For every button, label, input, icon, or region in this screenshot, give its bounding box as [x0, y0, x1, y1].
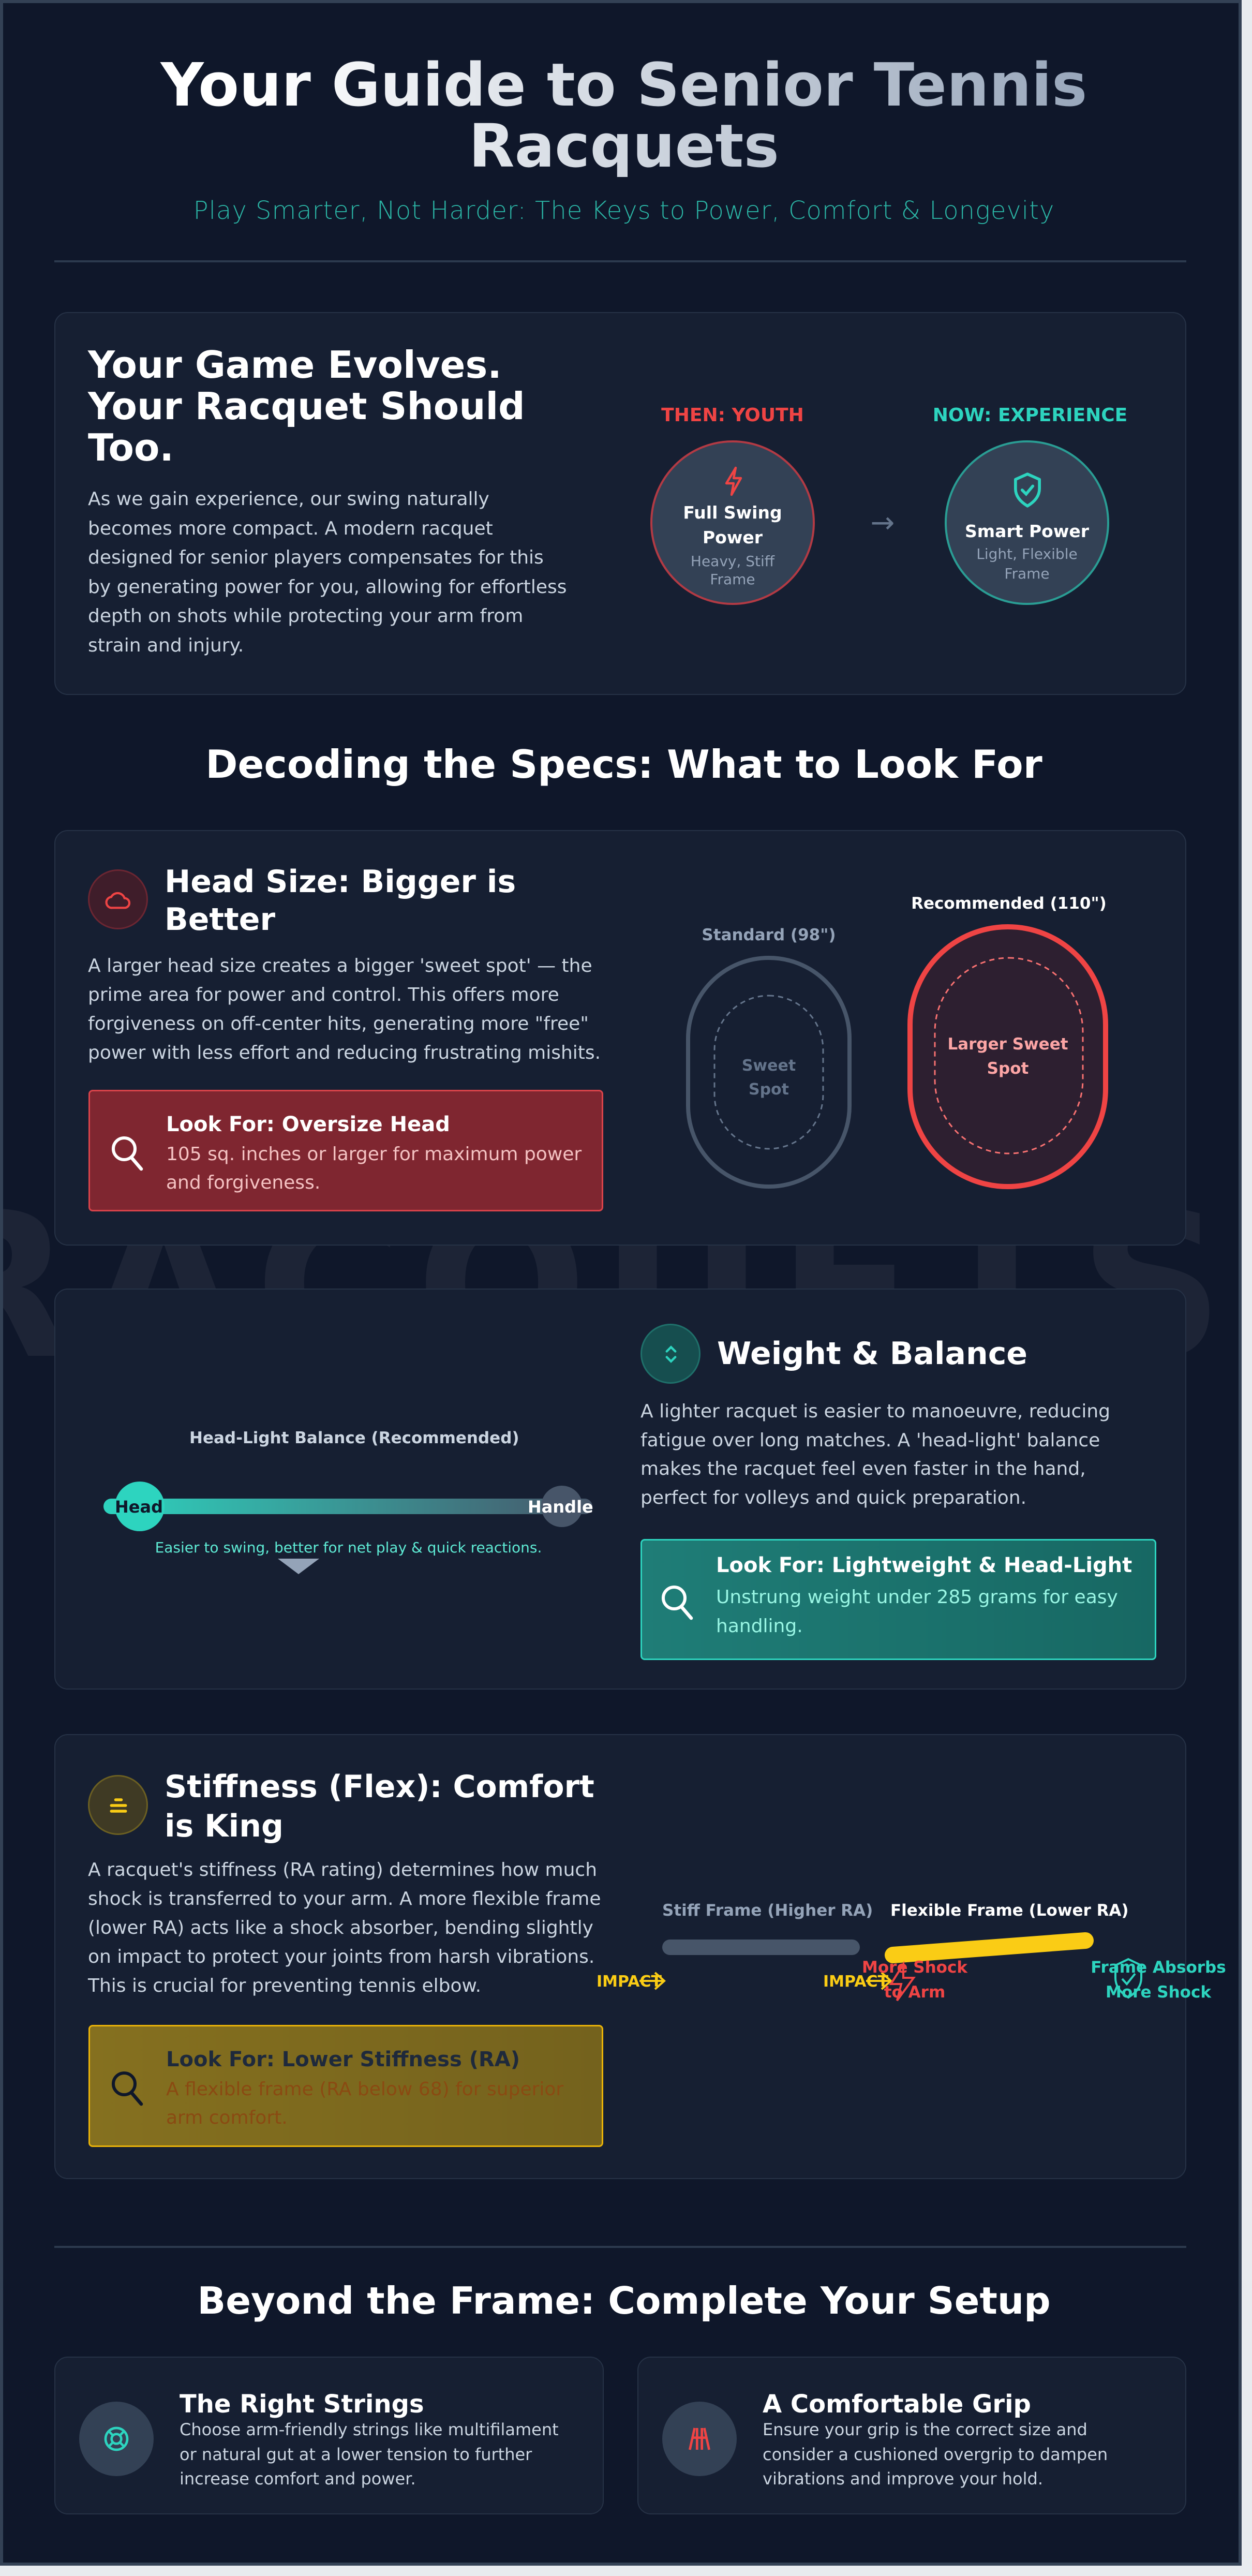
text: stiffness body	[88, 1859, 601, 1996]
circle: full swing power: Heavy, Stiff	[691, 553, 774, 570]
panel: weight and balance	[54, 1289, 1186, 1690]
card: grip: Ensure your grip is the correct size and	[763, 2420, 1087, 2439]
title	[3, 55, 1245, 177]
title: Racquets	[469, 112, 779, 181]
heading: weight and balance: Weight & Balance	[717, 1336, 1027, 1372]
chart: balance bar: Handle	[528, 1497, 593, 1517]
racquet: recommended	[907, 924, 1108, 1189]
text: weight body: makes the racquet feel even faster in the hand,	[640, 1458, 1086, 1479]
chart: stiffness comparison	[597, 1901, 1226, 2002]
chart: stiffness comparison: Stiff Frame (Higher RA)	[662, 1901, 873, 1920]
text: evolution body: becomes more compact. A modern racquet	[88, 518, 493, 539]
racquet: standard: Spot	[749, 1080, 789, 1099]
text: evolution body: As we gain experience, our swing naturally	[88, 488, 489, 510]
chart: stiffness comparison: More Shock	[862, 1958, 968, 1977]
card: strings	[54, 2357, 604, 2514]
heading: decoding the specs: Decoding the Specs: What to Look For	[205, 742, 1042, 787]
heading: head size	[165, 864, 516, 938]
card: strings: Choose arm-friendly strings like multifilament	[180, 2420, 559, 2439]
text: evolution body: strain and injury.	[88, 635, 244, 656]
callout: oversize head: and forgiveness.	[166, 1172, 320, 1193]
callout: lower stiffness: A flexible frame (RA below 68) for superior	[166, 2079, 563, 2100]
label: then youth: THEN: YOUTH	[661, 405, 804, 426]
chart: stiffness comparison: Flexible Frame (Lower RA)	[890, 1901, 1129, 1920]
card: grip: consider a cushioned overgrip to dampen	[763, 2445, 1108, 2464]
icon: strings	[79, 2402, 154, 2476]
text: head size body	[88, 955, 601, 1063]
heading: stiffness	[165, 1769, 594, 1844]
card: grip	[637, 2357, 1186, 2514]
heading: head size: Head Size: Bigger is	[165, 864, 516, 900]
arrow: →	[871, 506, 895, 540]
circle: smart power	[945, 440, 1109, 605]
icon: balance arrows	[640, 1324, 700, 1384]
racquet: recommended: Spot	[987, 1059, 1029, 1078]
heading: beyond the frame: Beyond the Frame: Complete Your Setup	[197, 2279, 1051, 2322]
label: head-light balance: Head-Light Balance (Recommended)	[189, 1429, 519, 1447]
callout: lower stiffness: Look For: Lower Stiffness (RA)	[166, 2048, 520, 2071]
panel: stiffness	[54, 1734, 1186, 2179]
callout: lightweight	[640, 1539, 1156, 1660]
card: strings: or natural gut at a lower tension to further	[180, 2445, 532, 2464]
circle: full swing power: Frame	[710, 571, 755, 588]
subtitle: Play Smarter, Not Harder: The Keys to Power, Comfort & Longevity	[193, 196, 1054, 225]
icon: cloud	[88, 869, 148, 929]
icon: grip	[662, 2402, 737, 2476]
circle: full swing power: Full Swing	[683, 502, 782, 523]
circle: smart power: Frame	[1004, 565, 1050, 582]
heading: game evolves	[87, 343, 525, 469]
callout: lower stiffness: arm comfort.	[166, 2107, 288, 2128]
callout: oversize head	[88, 1090, 603, 1211]
text: head size body: A larger head size creates a bigger 'sweet spot' — the	[88, 955, 592, 976]
racquet: standard	[686, 956, 852, 1189]
racquet: standard: Sweet	[742, 1057, 796, 1075]
chart: stiffness comparison: to Arm	[884, 1983, 945, 2002]
text: stiffness body: This is crucial for preventing tennis elbow.	[88, 1975, 481, 1996]
text: stiffness body: shock is transferred to your arm. A more flexible frame	[88, 1888, 601, 1909]
callout: lightweight: Look For: Lightweight & Head-Light	[716, 1553, 1132, 1577]
heading: game evolves: Your Game Evolves.	[88, 343, 502, 387]
text: weight body	[640, 1401, 1110, 1508]
racquet: recommended: Larger Sweet	[947, 1035, 1068, 1054]
chart: stiffness comparison: Frame Absorbs	[1091, 1958, 1226, 1977]
circle: smart power: Light, Flexible	[976, 545, 1078, 562]
heading: game evolves: Too.	[88, 426, 174, 469]
circle: full swing power	[650, 440, 815, 605]
chart: stiffness comparison: More Shock	[1106, 1983, 1212, 2002]
text: weight body: perfect for volleys and quick preparation.	[640, 1487, 1026, 1508]
card: grip: vibrations and improve your hold.	[763, 2469, 1043, 2489]
text: evolution body	[88, 488, 567, 656]
text: weight body: fatigue over long matches. A 'head-light' balance	[640, 1429, 1100, 1451]
callout: lower stiffness	[88, 2025, 603, 2147]
text: stiffness body: A racquet's stiffness (RA rating) determines how much	[88, 1859, 597, 1881]
icon: stiffness layers	[88, 1775, 148, 1835]
card: grip: A Comfortable Grip	[763, 2390, 1031, 2419]
label: recommended 110: Recommended (110")	[911, 894, 1107, 913]
heading: stiffness: is King	[165, 1808, 284, 1844]
callout: lightweight: Unstrung weight under 285 grams for easy	[716, 1587, 1118, 1608]
text: stiffness body: (lower RA) acts like a shock absorber, bending slightly	[88, 1917, 593, 1938]
circle: full swing power: Power	[703, 527, 763, 547]
card: strings: The Right Strings	[180, 2390, 424, 2419]
text: balance caption: Easier to swing, better for net play & quick reactions.	[155, 1539, 542, 1556]
chart: stiffness comparison: IMPACT	[597, 1973, 662, 1991]
heading: game evolves: Your Racquet Should	[88, 384, 525, 428]
circle: smart power: Smart Power	[965, 521, 1089, 541]
callout: lightweight: handling.	[716, 1616, 803, 1637]
text: stiffness body: on impact to protect your joints from harsh vibrations.	[88, 1946, 594, 1967]
text: evolution body: by generating power for you, allowing for effortless	[88, 576, 567, 598]
label: standard 98: Standard (98")	[702, 926, 836, 944]
icon: triangle pointer	[278, 1559, 319, 1574]
text: evolution body: designed for senior players compensates for this	[88, 547, 544, 568]
text: evolution body: depth on shots while protecting your arm from	[88, 605, 523, 627]
panel: head size	[54, 830, 1186, 1246]
text: weight body: A lighter racquet is easier to manoeuvre, reducing	[640, 1401, 1110, 1422]
text: head size body: prime area for power and control. This offers more	[88, 984, 559, 1005]
callout: oversize head: 105 sq. inches or larger for maximum power	[166, 1144, 582, 1165]
label: now experience: NOW: EXPERIENCE	[933, 405, 1127, 426]
chart: stiffness comparison: IMPACT	[823, 1973, 888, 1991]
text: head size body: power with less effort and reducing frustrating mishits.	[88, 1042, 601, 1063]
heading: stiffness: Stiffness (Flex): Comfort	[165, 1769, 594, 1805]
card: strings: increase comfort and power.	[180, 2469, 416, 2489]
title: Your Guide to Senior Tennis	[160, 51, 1087, 120]
panel: evolution	[54, 312, 1186, 695]
chart: balance bar: Head	[115, 1497, 163, 1517]
chart: balance bar	[103, 1482, 593, 1531]
heading: head size: Better	[165, 901, 275, 938]
callout: oversize head: Look For: Oversize Head	[166, 1113, 450, 1136]
text: head size body: forgiveness on off-center hits, generating more "free"	[88, 1013, 589, 1034]
